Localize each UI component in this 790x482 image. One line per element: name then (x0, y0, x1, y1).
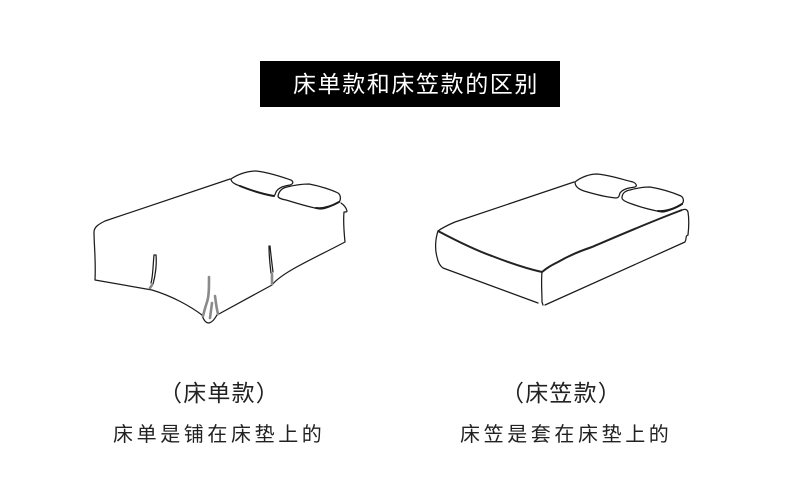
title (260, 61, 560, 107)
pillow: left (231, 171, 293, 196)
mattress front-left edge (438, 231, 542, 272)
pillow: left (575, 174, 636, 198)
mattress sides (436, 209, 689, 305)
pillow: right (278, 184, 340, 209)
label: flat sheet type: （床单款） (159, 380, 280, 406)
title: 床单款和床笠款的区别 (293, 71, 539, 97)
sheet fold: corner (203, 277, 218, 318)
bed sheet outline (94, 179, 347, 323)
sheet fold: right (269, 246, 273, 273)
mattress front-right edge (542, 210, 682, 272)
caption: fitted sheet: 床笠是套在床垫上的 (460, 424, 672, 446)
label: fitted sheet type: （床笠款） (501, 380, 622, 406)
mattress top outline (438, 182, 574, 231)
sheet fold: left (151, 255, 156, 284)
caption: flat sheet: 床单是铺在床垫上的 (113, 424, 325, 446)
pillow: right (622, 187, 683, 212)
